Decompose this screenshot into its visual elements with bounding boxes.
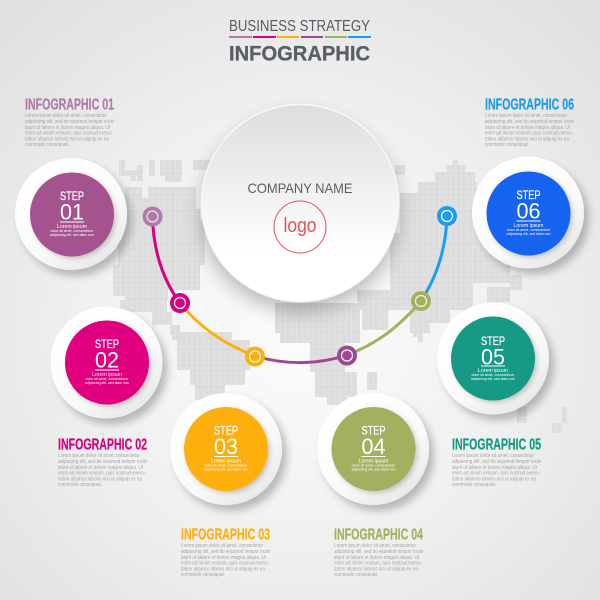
text block 03: idunt ut labore et dolore magna aliqua. Ut [181,555,266,561]
logo [274,201,326,253]
step 06 badge: dolor sit amet, consectetuer [507,228,551,232]
text block 01: INFOGRAPHIC 01 [25,96,114,114]
step 05 badge: dolor sit amet, consectetuer [472,373,515,377]
text block 01 [25,96,115,148]
text block 01: commodo consequat. [25,142,69,148]
step 03 badge: STEP [214,426,238,438]
text block 03: commodo consequat. [181,572,225,578]
text block 02: tation ullamco laboris nisi ut aliquip ex ea [58,476,143,482]
node 5 [411,291,431,311]
center circle [202,104,398,302]
text block 04: tation ullamco laboris nisi ut aliquip ex ea [334,566,419,572]
step 04 badge: STEP [362,426,386,438]
text block 05: INFOGRAPHIC 05 [452,436,541,454]
step 02 badge: dolor sit amet, consectetuer [86,377,129,381]
text block 05: adipiscing elit, sed do eiusmod tempor incid- [452,459,542,465]
node 6 [437,206,457,226]
step 02 badge [50,306,162,418]
logo: logo [284,215,316,237]
step 03 badge: adipiscing elit, sed diam non [204,468,248,472]
step 04 badge: adipiscing elit, sed diam non [352,468,396,472]
step 06 badge: adipiscing elit, sed diam non [507,232,551,236]
step 06 badge: Lorem ipsum [514,223,543,229]
text block 06: commodo consequat. [485,142,529,148]
text block 04: INFOGRAPHIC 04 [334,526,423,544]
step 04 badge: 04 [362,434,386,459]
text block 01: adipiscing elit, sed do eiusmod tempor incid- [25,119,115,125]
step 01 badge [15,158,127,270]
text block 05 [452,436,542,488]
title line: business strategy: BUSINESS STRATEGY [229,18,370,35]
text block 03: Lorem ipsum dolor sit amet, consectetur [181,543,263,549]
text block 06: adipiscing elit, sed do eiusmod tempor incid- [485,119,575,125]
title [229,18,371,66]
text block 02 [58,436,148,488]
title line: infographic: INFOGRAPHIC [229,42,370,66]
world map of pixel squares [113,160,567,433]
step 03 badge: Lorem ipsum [211,458,241,464]
text block 03: adipiscing elit, sed do eiusmod tempor incid- [181,549,271,555]
step 01 badge: Lorem ipsum [57,224,87,230]
text block 03: INFOGRAPHIC 03 [181,526,270,544]
text block 02: INFOGRAPHIC 02 [58,436,147,454]
text block 02: Lorem ipsum dolor sit amet, consectetur [58,453,140,459]
text block 06: Lorem ipsum dolor sit amet, consectetur [485,113,567,119]
step 02 badge: Lorem ipsum [92,372,122,378]
text block 01: Lorem ipsum dolor sit amet, consectetur [25,113,107,119]
step 01 badge: STEP [60,191,84,203]
title colour bars [229,36,371,38]
step 03 badge: 03 [214,434,238,459]
connector curve [152,216,447,363]
text block 05: enim ad minim veniam, quis nostrud exerci- [452,471,540,477]
step 01 badge: adipiscing elit, sed diam non [50,233,94,237]
step 06 badge [472,156,584,268]
node 1 [142,206,162,226]
node 4 [337,346,357,366]
text block 06: idunt ut labore et dolore magna aliqua. Ut [485,125,570,131]
step 02 badge: 02 [95,348,119,372]
step 05 badge: adipiscing elit, sed diam non [471,377,515,381]
text block 02: idunt ut labore et dolore magna aliqua. Ut [58,465,143,471]
step 04 badge: Lorem ipsum [359,458,388,464]
step 03 badge [170,393,282,505]
text block 04: Lorem ipsum dolor sit amet, consectetur [334,543,416,549]
step 01 badge: dolor sit amet, consectetuer [50,229,94,233]
text block 04: adipiscing elit, sed do eiusmod tempor incid- [334,549,424,555]
text block 06: enim ad minim veniam, quis nostrud exerci- [485,131,573,137]
text block 02: enim ad minim veniam, quis nostrud exerci- [58,471,146,477]
text block 04: commodo consequat. [334,572,378,578]
text block 02: adipiscing elit, sed do eiusmod tempor incid- [58,459,148,465]
node 3 [245,346,265,366]
text block 03 [181,526,271,578]
step 05 badge: 05 [481,344,505,370]
text block 02: commodo consequat. [58,482,102,488]
text block 01: enim ad minim veniam, quis nostrud exerci- [25,131,113,137]
step 05 badge: STEP [481,336,505,348]
step 02 badge: STEP [95,339,119,351]
step 03 badge: dolor sit amet, consectetuer [204,464,248,468]
text block 01: idunt ut labore et dolore magna aliqua. Ut [25,125,110,131]
text block 05: idunt ut labore et dolore magna aliqua. Ut [452,465,537,471]
text block 04: enim ad minim veniam, quis nostrud exerci- [334,561,422,567]
text block 06: tation ullamco laboris nisi ut aliquip ex ea [485,136,570,142]
step 02 badge: adipiscing elit, sed diam non [85,381,129,385]
step 06 badge: STEP [516,190,541,202]
step 01 badge: 01 [60,200,84,224]
text block 05: tation ullamco laboris nisi ut aliquip ex ea [452,476,537,482]
text block 04 [334,526,424,578]
step 06 badge: 06 [516,198,540,224]
text block 01: tation ullamco laboris nisi ut aliquip ex ea [25,136,110,142]
text block 05: commodo consequat. [452,482,496,488]
text block 03: tation ullamco laboris nisi ut aliquip ex ea [181,566,266,572]
step 04 badge [317,393,429,505]
company name: COMPANY NAME [248,180,352,196]
step 05 badge [437,302,549,414]
text block 03: enim ad minim veniam, quis nostrud exerci- [181,561,269,567]
text block 04: idunt ut labore et dolore magna aliqua. Ut [334,555,419,561]
text block 06 [485,96,575,148]
text block 05: Lorem ipsum dolor sit amet, consectetur [452,453,534,459]
step 04 badge: dolor sit amet, consectetuer [352,464,396,468]
node 2 [170,293,190,313]
step 05 badge: Lorem ipsum [478,368,508,374]
